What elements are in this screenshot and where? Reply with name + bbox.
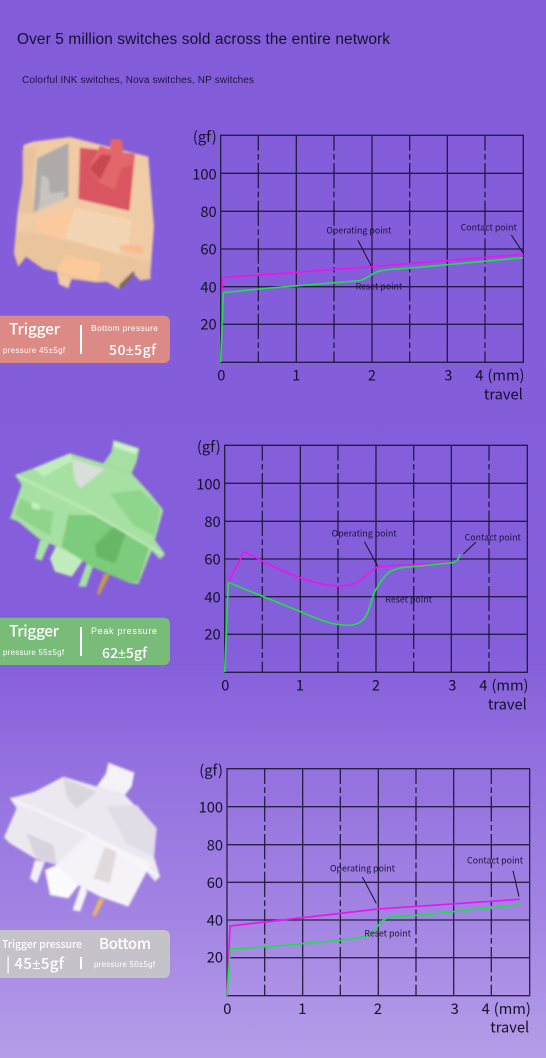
- y axis labels: 80: [204, 511, 221, 532]
- icon: clear switch: [4, 763, 160, 917]
- subtitle: Colorful INK switches, Nova switches, NP switches: [22, 75, 254, 86]
- icon: green switch: [10, 440, 165, 595]
- y axis labels: [192, 126, 217, 334]
- x axis labels: (mm): [494, 998, 531, 1019]
- chart: green switch force curve: Reset point: [385, 593, 433, 606]
- x axis labels: 3: [448, 675, 456, 696]
- bottom value: pressure 50±5gf: [94, 960, 156, 969]
- title: Over 5 million switches sold across the entire network: [17, 31, 390, 48]
- y axis labels: 60: [207, 872, 223, 893]
- x axis labels: 4: [475, 365, 483, 386]
- bottom heading: Bottom: [99, 933, 151, 954]
- y axis labels: (gf): [199, 759, 223, 780]
- y axis labels: 60: [204, 549, 221, 570]
- force curves: [222, 254, 523, 292]
- trigger value: | 45±5gf: [6, 953, 65, 974]
- y axis labels: 80: [207, 834, 223, 855]
- y axis labels: 20: [200, 313, 217, 334]
- x axis labels: 3: [451, 998, 459, 1019]
- x axis labels: travel: [484, 383, 523, 404]
- peak pressure heading: Peak pressure: [91, 626, 157, 636]
- x axis labels: 0: [217, 365, 225, 386]
- callout: tan switch pressure: [0, 316, 170, 363]
- y axis labels: [196, 436, 221, 644]
- x axis labels: 2: [372, 675, 380, 696]
- force curves: [228, 552, 460, 586]
- chart: tan switch force curve: Contact point: [461, 220, 517, 233]
- y axis labels: 100: [199, 797, 223, 818]
- y axis labels: 40: [200, 276, 217, 297]
- bottom pressure value: 50±5gf: [109, 340, 157, 360]
- trigger heading: Trigger: [9, 318, 61, 340]
- chart: tan switch force curve: [192, 126, 525, 404]
- x axis labels: (mm): [491, 675, 529, 696]
- x axis labels: 4: [479, 675, 487, 696]
- y axis labels: 20: [207, 947, 223, 968]
- y axis labels: (gf): [197, 436, 221, 457]
- callout: green switch pressure: [0, 618, 170, 665]
- annotations: Operating point: [332, 527, 397, 540]
- x axis labels: [223, 998, 531, 1038]
- trigger value: pressure 55±5gf: [3, 648, 65, 657]
- chart: green switch force curve: Contact point: [465, 530, 521, 543]
- x axis labels: 1: [292, 365, 300, 386]
- callout: clear switch pressure: [0, 930, 170, 978]
- x axis labels: 1: [298, 998, 306, 1019]
- trigger value: pressure 45±5gf: [3, 346, 66, 355]
- x axis labels: travel: [490, 1017, 529, 1038]
- x axis labels: 4: [482, 998, 490, 1019]
- bottom pressure heading: Bottom pressure: [91, 323, 158, 333]
- y axis labels: 60: [200, 239, 217, 260]
- x axis labels: 1: [296, 675, 304, 696]
- y axis labels: 100: [192, 163, 217, 184]
- x axis labels: 3: [444, 365, 452, 386]
- x axis labels: [217, 365, 525, 404]
- y axis labels: 20: [204, 623, 221, 644]
- trigger pressure heading: Trigger pressure: [2, 937, 82, 952]
- force curves: [227, 899, 520, 996]
- y axis labels: 40: [204, 586, 221, 607]
- y axis labels: 100: [196, 473, 221, 494]
- x axis labels: [221, 675, 529, 714]
- x axis labels: (mm): [487, 365, 525, 386]
- trigger heading: Trigger: [9, 620, 60, 642]
- y axis labels: [199, 759, 223, 968]
- y axis labels: 40: [207, 910, 223, 931]
- icon: tan and red switch: [14, 137, 154, 288]
- x axis labels: travel: [488, 693, 527, 714]
- x axis labels: 2: [368, 365, 376, 386]
- annotations: Operating point: [326, 223, 392, 236]
- peak pressure value: 62±5gf: [102, 643, 148, 663]
- x axis labels: 2: [374, 998, 382, 1019]
- chart: tan switch force curve: Reset point: [356, 279, 403, 292]
- x axis labels: 0: [221, 675, 229, 696]
- y axis labels: (gf): [193, 126, 217, 147]
- annotations: Operating point: [330, 862, 396, 875]
- chart: clear switch force curve: Contact point: [467, 854, 524, 867]
- chart: green switch force curve: [196, 436, 529, 714]
- chart: clear switch force curve: Reset point: [364, 927, 412, 940]
- x axis labels: 0: [223, 998, 231, 1019]
- chart: clear switch force curve: [199, 759, 531, 1038]
- y axis labels: 80: [200, 201, 217, 222]
